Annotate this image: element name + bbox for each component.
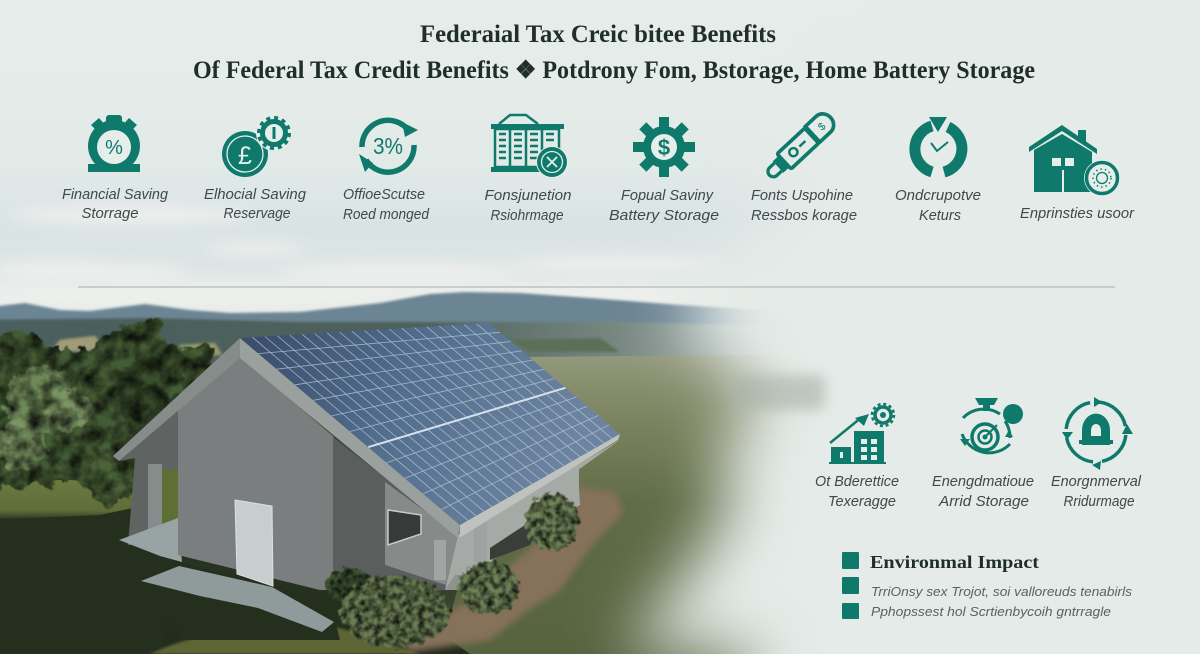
icon: house with sun badge <box>1029 125 1120 196</box>
label: arrid storage: Arrid Storage <box>938 494 1029 510</box>
panel grid <box>252 324 612 520</box>
view through porch <box>160 470 181 530</box>
house <box>113 323 620 632</box>
side porch back <box>445 440 620 590</box>
legend <box>842 552 1133 619</box>
icon: stopwatch percent <box>88 115 140 172</box>
legend marker 1 <box>842 552 859 569</box>
fade overlay <box>620 0 1200 654</box>
eave edge <box>459 434 620 538</box>
haze patch <box>735 375 825 410</box>
left rake <box>113 338 240 461</box>
distant valley <box>0 318 800 372</box>
side wall <box>333 437 458 595</box>
icon: battery tool: $ <box>816 120 828 133</box>
label: fonts uspohine: Fonts Uspohine <box>751 188 853 204</box>
mountains <box>0 292 800 345</box>
label: fonsjunetion: Fonsjunetion <box>484 188 572 204</box>
icon: clock cycle <box>915 117 962 172</box>
front gable wall <box>178 356 334 590</box>
solid pale right side <box>865 0 1200 654</box>
icon: pound coin with gear <box>222 115 292 177</box>
legend heading: Environmal Impact <box>870 552 1039 572</box>
label: financial saving: Financial Saving <box>62 187 168 203</box>
sky background <box>0 0 1200 340</box>
title: Federaial Tax Creic bitee Benefits <box>420 21 776 48</box>
bushes <box>326 494 579 648</box>
porch slab <box>119 518 182 562</box>
label: battery storage: Battery Storage <box>609 208 719 224</box>
icon: dollar gear <box>633 117 695 177</box>
icon: environmental cycle <box>1062 397 1133 470</box>
title: Of Federal Tax Credit Benefits ❖ Potdrony Fom, Bstorage, Home Battery Storage <box>193 57 1035 84</box>
label: fopual saviny: Fopual Saviny <box>621 188 714 204</box>
label: office scutse: OffioeScutse <box>343 187 425 203</box>
label: ondcrupotve: Ondcrupotve <box>895 188 981 204</box>
porch post <box>148 464 162 534</box>
label: keturs: Keturs <box>919 208 961 224</box>
door <box>235 500 273 586</box>
bright seam <box>368 388 565 447</box>
icon: building with x badge <box>491 115 568 178</box>
icon: 3 percent cycle <box>359 120 418 172</box>
porch post right <box>474 522 487 562</box>
tree backing <box>0 360 210 480</box>
foreground grass <box>0 455 470 654</box>
icon: stopwatch percent: % <box>105 137 123 159</box>
icon: dollar gear: $ <box>658 135 670 160</box>
legend marker 3 <box>842 603 859 619</box>
label: ressbos korage: Ressbos korage <box>751 208 857 224</box>
label: road monged: Roed monged <box>343 207 430 223</box>
entrance slab <box>141 566 334 632</box>
window <box>388 510 421 545</box>
legend marker 2 <box>842 577 859 594</box>
legend line 1: TrriOnsy sex Trojot, soi valloreuds tenabirls <box>871 584 1133 599</box>
label: rsiohrmage: Rsiohrmage <box>490 208 564 224</box>
icon: target stopwatch <box>960 398 1023 453</box>
label: enengdmatioue: Enengdmatioue <box>932 474 1034 490</box>
icon: growth building <box>829 404 894 464</box>
side wall lit <box>385 482 458 585</box>
icon: pound coin with gear: £ <box>238 142 252 170</box>
label: texeragge: Texeragge <box>828 494 896 510</box>
icon: 3 percent cycle: 3% <box>373 133 403 159</box>
solar roof <box>240 323 620 525</box>
trees <box>0 322 215 505</box>
label: ot bderettice: Ot Bderettice <box>815 474 899 490</box>
right fascia <box>240 338 460 538</box>
label: reservage: Reservage <box>224 206 290 222</box>
label: elhocial saving: Elhocial Saving <box>204 187 306 203</box>
clouds <box>0 206 760 302</box>
horizon divider <box>78 286 1115 288</box>
landscape field <box>440 354 860 654</box>
left porch recess <box>119 409 180 545</box>
label: enprinsties usoor: Enprinsties usoor <box>1020 206 1135 222</box>
label: enorgnmerval: Enorgnmerval <box>1051 474 1142 490</box>
title <box>193 21 1035 84</box>
label: storage: Storrage <box>82 206 138 222</box>
icon: battery tool <box>762 110 838 183</box>
porch shadow <box>490 515 545 560</box>
dirt path <box>400 487 623 652</box>
ground base <box>0 350 640 654</box>
label: rridurmage: Rridurmage <box>1064 494 1134 510</box>
legend line 2: Pphopssest hol Scrtienbycoih gntrragle <box>871 604 1111 619</box>
